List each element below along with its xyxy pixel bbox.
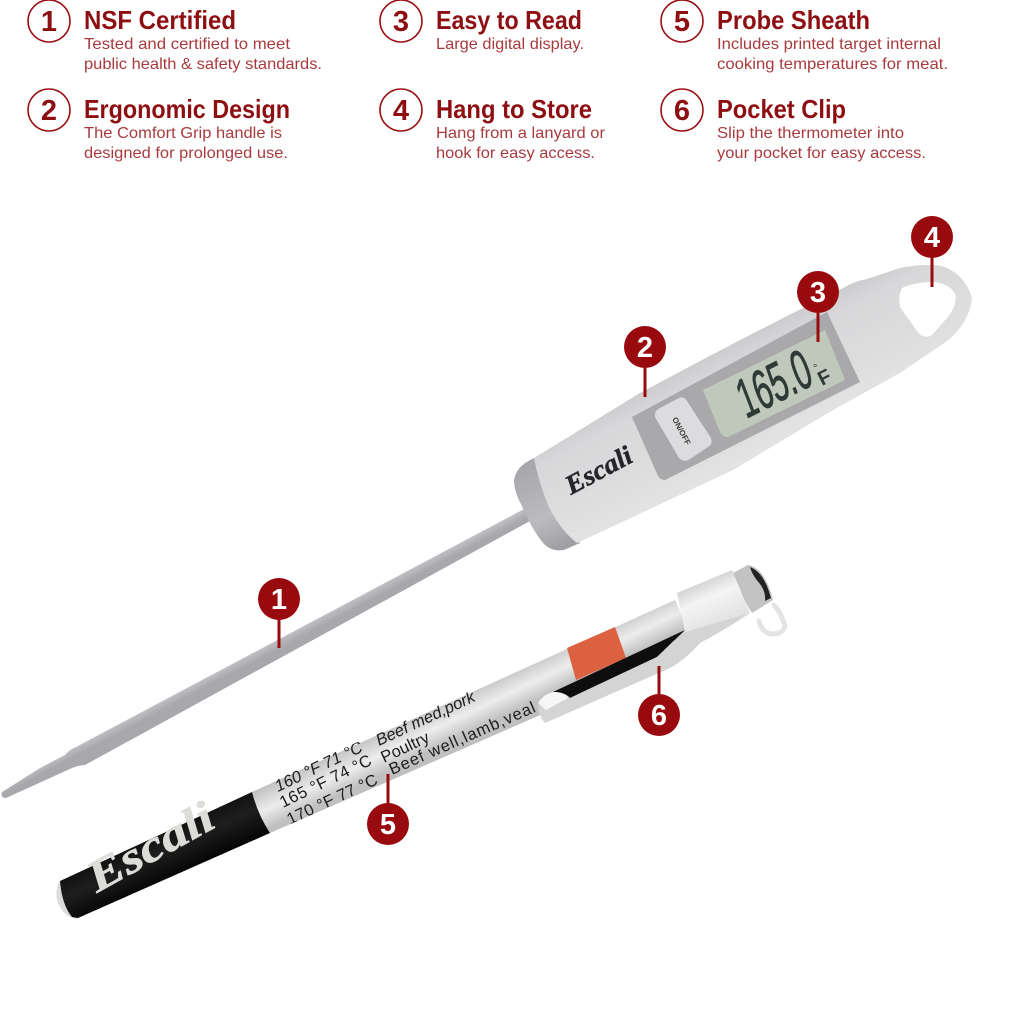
feature 5: Probe Sheath: cooking temperatures for meat. — [717, 56, 948, 73]
feature 1: NSF Certified — [28, 0, 322, 73]
feature 3: Easy to Read: Easy to Read — [436, 5, 582, 35]
handle body with hanging loop — [534, 265, 972, 543]
feature 2: Ergonomic Design: The Comfort Grip handle is — [84, 125, 282, 142]
LCD screen: 165.0 — [728, 337, 820, 430]
feature 1: NSF Certified: NSF Certified — [84, 5, 236, 35]
feature 6: Pocket Clip: 6 — [674, 95, 690, 127]
printed temperature table: 165 °F 74 °C — [277, 752, 375, 812]
feature 5: Probe Sheath: Includes printed target internal — [717, 36, 941, 53]
feature 6: Pocket Clip: Pocket Clip — [717, 94, 846, 124]
callout 3: 3 — [810, 277, 826, 309]
feature 4: Hang to Store: hook for easy access. — [436, 145, 595, 162]
feature 2: Ergonomic Design: designed for prolonged use. — [84, 145, 288, 162]
white collar — [677, 570, 750, 632]
feature 2: Ergonomic Design: Ergonomic Design — [84, 94, 290, 124]
LCD screen — [703, 330, 845, 437]
callout 3 — [797, 271, 839, 342]
sheath logo: Escali — [77, 792, 223, 902]
feature 6: Pocket Clip: Slip the thermometer into — [717, 125, 904, 142]
feature list — [28, 0, 948, 162]
printed temperature table: 170 °F 77 °C — [284, 771, 381, 829]
on/off button: ON/OFF — [670, 416, 692, 447]
callout 4 — [911, 216, 953, 287]
pocket clip — [538, 613, 750, 723]
callout 1: 1 — [271, 584, 287, 616]
feature 6: Pocket Clip — [661, 89, 926, 162]
LCD screen: ° — [812, 362, 821, 375]
feature 3: Easy to Read — [380, 0, 584, 53]
red target band — [567, 627, 626, 680]
feature 1: NSF Certified: public health & safety standards. — [84, 56, 322, 73]
printed temperature table: Poultry — [378, 728, 433, 767]
feature 3: Easy to Read: 3 — [393, 6, 409, 38]
callout 1 — [258, 578, 300, 648]
callout 6: 6 — [651, 700, 667, 732]
callout 2 — [624, 326, 666, 397]
callout 5 — [367, 774, 409, 845]
on/off button — [655, 397, 712, 461]
feature 5: Probe Sheath — [661, 0, 948, 73]
feature 4: Hang to Store — [380, 89, 606, 162]
silver sheath body — [252, 600, 690, 833]
LCD screen: F — [814, 365, 835, 390]
callout 5: 5 — [380, 809, 396, 841]
printed temperature table: 160 °F 71 °C — [272, 738, 366, 796]
feature 3: Easy to Read: Large digital display. — [436, 36, 584, 53]
callout 4: 4 — [924, 222, 940, 254]
probe sheath — [56, 565, 785, 918]
black sheath cap — [56, 792, 270, 918]
callout 2: 2 — [637, 332, 653, 364]
collar — [514, 458, 580, 550]
sheath end ring — [733, 565, 773, 613]
feature 4: Hang to Store: Hang to Store — [436, 94, 592, 124]
handle logo: Escali — [559, 440, 638, 501]
printed temperature table: Beef med,pork — [373, 688, 479, 750]
callout 6 — [638, 666, 680, 736]
feature 2: Ergonomic Design — [28, 89, 290, 162]
printed temperature table — [272, 688, 538, 829]
thermometer — [2, 265, 972, 798]
probe — [2, 508, 530, 798]
feature 5: Probe Sheath: 5 — [674, 6, 690, 38]
feature 2: Ergonomic Design: 2 — [41, 95, 57, 127]
display panel — [632, 312, 860, 480]
feature 1: NSF Certified: 1 — [41, 6, 57, 38]
feature 6: Pocket Clip: your pocket for easy access. — [717, 145, 926, 162]
feature 4: Hang to Store: Hang from a lanyard or — [436, 125, 606, 142]
feature 4: Hang to Store: 4 — [393, 95, 409, 127]
dark clip slot — [553, 630, 685, 698]
feature 1: NSF Certified: Tested and certified to meet — [84, 36, 291, 53]
sheath end loop — [759, 605, 785, 634]
printed temperature table: Beef well,lamb,veal — [386, 699, 538, 779]
feature 5: Probe Sheath: Probe Sheath — [717, 5, 870, 35]
